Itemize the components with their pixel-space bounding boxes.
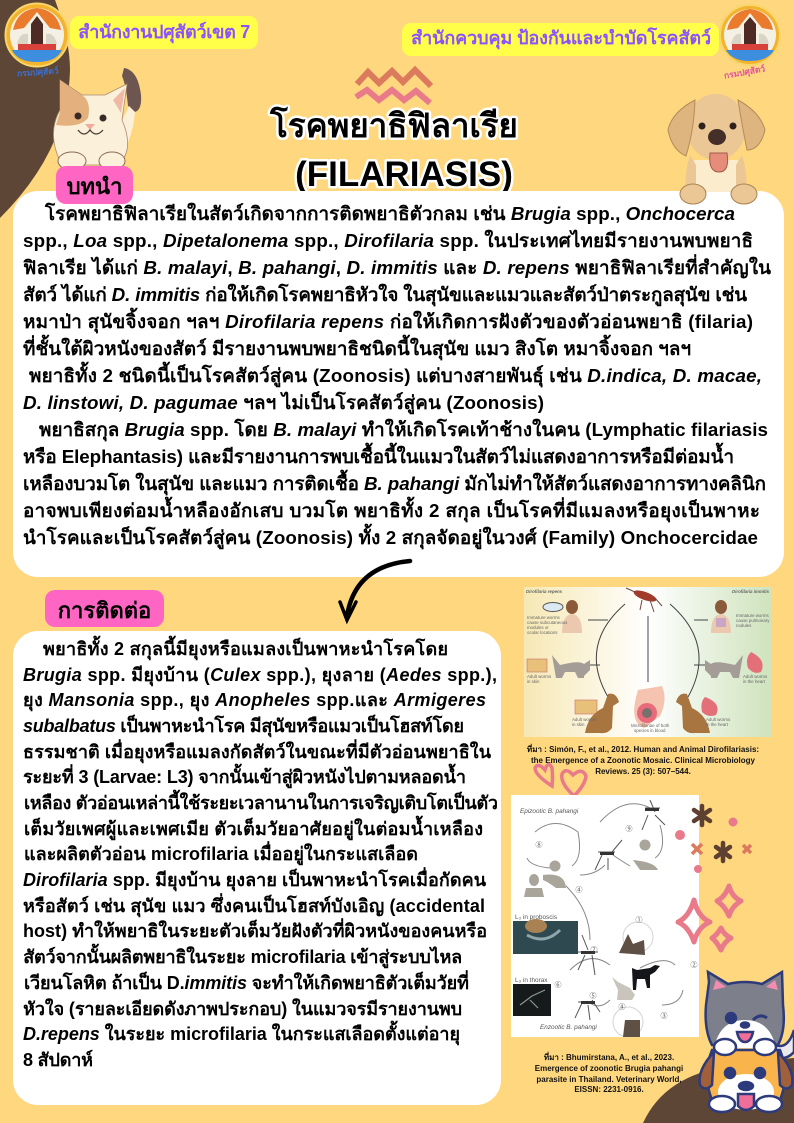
icon: cat (53, 68, 141, 170)
human figures (562, 600, 731, 633)
panel: transmission (13, 631, 501, 1105)
icon: dog (668, 94, 765, 204)
dogs (585, 694, 710, 733)
zigzag decoration (356, 70, 431, 103)
caption: figure 2 source: parasite in Thailand. Veterinary World, (536, 1075, 682, 1084)
stage numbers: ③ (660, 1012, 668, 1020)
text block: transmission: พยาธิทั้ง 2 สกุลนี้มียุงหรือแมลงเป็นพาหะนำโรคโดย (43, 635, 448, 661)
black dog and white cat (612, 965, 660, 1000)
logo left (6, 4, 68, 79)
title: โรคพยาธิฟิลาเรีย (269, 106, 518, 144)
caption: figure 2 source: EISSN: 2231-0916. (574, 1085, 644, 1094)
label: regional office (70, 16, 258, 49)
figure: Dirofilaria life cycle: species in blood (634, 728, 666, 733)
arrow (340, 561, 410, 620)
figure: Dirofilaria life cycle: ocular locations (527, 630, 558, 635)
figure: Dirofilaria life cycle: Adult worms (572, 717, 597, 722)
caption: figure 1 source: Reviews. 25 (3): 507–544. (595, 767, 691, 776)
text block: transmission (23, 635, 498, 1070)
photo: L3 in thorax (513, 984, 551, 1016)
brown mound bottom right (643, 1058, 794, 1123)
text block: transmission: ยุง Mansonia spp., ยุง Anopheles spp.และ Armigeres (23, 690, 486, 712)
figure: Brugia pahangi life cycle: L₃ in proboscis (515, 914, 557, 921)
skin and heart samples (527, 652, 763, 716)
figure: Dirofilaria life cycle: in the heart (743, 679, 766, 684)
text block: introduction: spp., Loa spp., Dipetalonema spp., Dirofilaria spp. ในประเทศไทยมีรายงานพบพยาธิ (23, 229, 753, 251)
stage numbers: ⑧ (536, 841, 542, 849)
caption: figure 2 source: ที่มา : Bhumirstana, A., et al., 2023. (544, 1051, 674, 1062)
stage numbers: ⑥ (554, 981, 562, 989)
text block: introduction: พยาธิทั้ง 2 ชนิดนี้เป็นโรคสัตว์สู่คน (Zoonosis) แต่บางสายพันธุ์ เช่น D.indica, D. macae, (29, 361, 762, 388)
stage numbers: ④ (576, 886, 582, 894)
text block: transmission: หัวใจ (รายละเอียดดังภาพประกอบ) ในแมวจรมีรายงานพบ (23, 998, 462, 1019)
heading: transmission (45, 590, 164, 627)
caption: figure 1 source (527, 743, 759, 776)
heading: introduction: บทนำ (67, 174, 122, 199)
text block: introduction: นำโรคและเป็นโรคสัตว์สู่คน (Zoonosis) ทั้ง 2 สกุลจัดอยู่ในวงศ์ (Family) Onchocercidae (23, 523, 758, 550)
label: disease control bureau: สำนักควบคุม ป้องกันและบำบัดโรคสัตว์ (411, 27, 711, 50)
husky head (706, 972, 784, 1048)
eye (543, 602, 563, 612)
stage numbers: ⑦ (590, 946, 598, 954)
logo right: กรมปศุสัตว์ (723, 63, 766, 82)
stage numbers: ⑤ (590, 992, 596, 1000)
life cycle arrows (527, 804, 683, 1006)
figure: Dirofilaria life cycle: in the heart (706, 722, 729, 727)
mosquito (626, 588, 662, 612)
hearts (535, 764, 586, 796)
brown corner blob top left (0, 0, 70, 218)
grey human silhouettes (524, 840, 658, 897)
text block: transmission: subalbatus เป็นพาหะนำโรค มีสุนัขหรือแมวเป็นโฮสท์โดย (23, 714, 464, 738)
caption: figure 2 source (535, 1051, 683, 1094)
label: regional office: สำนักงานปศุสัตว์เขต 7 (78, 21, 250, 44)
text block: introduction (23, 202, 771, 550)
heading: transmission: การติดต่อ (58, 598, 151, 623)
text block: transmission: เวียนโลหิต ถ้าเป็น D.immitis จะทำให้เกิดพยาธิตัวเต็มวัยที่ (24, 970, 469, 993)
text block: transmission: 8 สัปดาห์ (23, 1049, 93, 1070)
title (269, 106, 518, 194)
text block: introduction: สัตว์ ได้แก่ D. immitis ก่อให้เกิดโรคพยาธิหัวใจ ในสุนัขและแมวและสัตว์ป่าตระกูลสุนัข เช่น (23, 283, 747, 307)
figure: Brugia pahangi life cycle (511, 795, 699, 1037)
figure: Brugia pahangi life cycle: L₃ in thorax (515, 977, 548, 984)
stage numbers: ② (690, 961, 698, 969)
text block: transmission: D.repens ในระยะ microfilaria ในกระแสเลือดตั้งแต่อายุ (23, 1020, 460, 1046)
orange dog head (700, 1050, 792, 1112)
figure: Dirofilaria life cycle: Microfilariae of both (631, 723, 670, 728)
decoration: stars and dots (675, 806, 751, 950)
photo: L3 in proboscis (513, 919, 578, 954)
text block: introduction: ฟิลาเรีย ได้แก่ B. malayi, B. pahangi, D. immitis และ D. repens พยาธิฟิลาเรียที่สำคัญใน (23, 254, 771, 279)
figure: Dirofilaria life cycle: cause subcutaneous (527, 620, 568, 625)
stage numbers: ① (636, 916, 642, 924)
figure: Dirofilaria life cycle: Adult worms (706, 717, 731, 722)
cats (552, 655, 743, 678)
text block: introduction: หมาป่า สุนัขจิ้งจอก ฯลฯ Dirofilaria repens ก่อให้เกิดการฝังตัวของตัวอ่อนพยาธิ (filaria) (23, 307, 753, 334)
figure: Dirofilaria life cycle: in skin (572, 722, 585, 727)
label: disease control bureau (402, 23, 719, 56)
figure: Dirofilaria life cycle: Adult worms (743, 674, 768, 679)
text block: transmission: Dirofilaria spp. มียุงบ้าน ยุงลาย เป็นพาหะนำโรคเมื่อกัดคน (23, 867, 487, 892)
text block: introduction: พยาธิสกุล Brugia spp. โดย B. malayi ทำให้เกิดโรคเท้าช้างในคน (Lymphatic filariasis (39, 418, 768, 442)
figure: Brugia pahangi life cycle: Enzootic B. pahangi (540, 1024, 597, 1031)
caption: figure 2 source: Emergence of zoonotic Brugia pahangi (535, 1064, 683, 1073)
mosquitoes (575, 800, 665, 1020)
heading: introduction (56, 166, 133, 204)
figure: Dirofilaria life cycle: modules or (527, 625, 549, 630)
caption: figure 1 source: ที่มา : Simón, F., et al., 2012. Human and Animal Dirofilariasis: (527, 743, 759, 754)
text block: introduction: D. linstowi, D. pagumae ฯลฯ ไม่เป็นโรคสัตว์สู่คน (Zoonosis) (23, 390, 544, 415)
title: (FILARIASIS) (295, 155, 513, 194)
caption: figure 1 source: the Emergence of a Zoonotic Mosaic. Clinical Microbiology (531, 756, 756, 765)
stage numbers: ⑨ (626, 825, 632, 833)
figure: Dirofilaria life cycle: nodules (736, 623, 752, 628)
text block: transmission: เต็มวัยเพศผู้และเพศเมีย ตัวเต็มวัยอาศัยอยู่ในต่อมน้ำเหลือง (24, 815, 483, 841)
husky paws (714, 1039, 736, 1055)
text block: transmission: เหลือง ตัวอ่อนเหล่านี้ใช้ระยะเวลานานในการเจริญเติบโตเป็นตัว (24, 789, 498, 814)
figure: Brugia pahangi life cycle: Epizootic B. pahangi (520, 808, 579, 815)
figure: Dirofilaria life cycle: Adult worms (527, 674, 552, 679)
text block: transmission: ระยะที่ 3 (Larvae: L3) จากนั้นเข้าสู่ผิวหนังไปตามหลอดน้ำ (23, 763, 466, 789)
stage numbers (536, 825, 698, 1020)
figure: Dirofilaria life cycle: Dirofilaria repens (526, 589, 563, 594)
text block: introduction: เหลืองบวมโต ในสุนัข และแมว การติดเชื้อ B. pahangi มักไม่ทำให้สัตว์แสดงอาการทางคลินิก (23, 469, 766, 496)
figure: Dirofilaria life cycle: in skin (527, 679, 540, 684)
figure: Dirofilaria life cycle (524, 587, 771, 737)
text block: transmission: ธรรมชาติ เมื่อยุงหรือแมลงกัดสัตว์ในขณะที่มีตัวอ่อนพยาธิใน (23, 739, 492, 764)
figure: Dirofilaria life cycle: Dirofilaria immitis (732, 589, 770, 594)
figure: Dirofilaria life cycle: Immature worms (736, 613, 769, 618)
life cycle arrows (585, 604, 708, 697)
figure: Dirofilaria life cycle: Immature worms (527, 615, 560, 620)
husky tail (772, 1030, 794, 1058)
text block: transmission: Brugia spp. มียุงบ้าน (Culex spp.), ยุงลาย (Aedes spp.), (23, 665, 497, 687)
blood vessel (634, 686, 665, 728)
text block: introduction: อาจพบเพียงต่อมน้ำหลืองอักเสบ บวมโต พยาธิทั้ง 2 สกุล เป็นโรคที่มีแมลงหรือยุงเป็นพาหะ (23, 496, 760, 523)
icon: husky puppy on dog (700, 972, 794, 1112)
logo right (720, 5, 780, 82)
inset: cat ears and dog leg (613, 922, 653, 1037)
text block: introduction: ที่ชั้นใต้ผิวหนังของสัตว์ มีรายงานพบพยาธิชนิดนี้ในสุนัข แมว สิงโต หมาจิ้งจอก ฯลฯ (23, 334, 691, 361)
text block: transmission: สัตว์จากนั้นผลิตพยาธิในระยะ microfilaria เข้าสู่ระบบไหล (23, 943, 462, 969)
text block: transmission: หรือสัตว์ เช่น สุนัข แมว ซึ่งคนเป็นโฮสท์บังเอิญ (accidental (23, 893, 485, 918)
text block: transmission: และผลิตตัวอ่อน microfilaria เมื่ออยู่ในกระแสเลือด (24, 841, 418, 866)
text block: introduction: หรือ Elephantasis) และมีรายงานการพบเชื้อนี้ในแมวในสัตว์ไม่แสดงอาการหรือมีต่อมน้ำ (23, 442, 734, 467)
figure: Dirofilaria life cycle: cause pulmonary (736, 618, 770, 623)
logo left: กรมปศุสัตว์ (17, 66, 59, 79)
text block: transmission: host) ทำให้พยาธิในระยะตัวเต็มวัยฝังตัวที่ผิวหนังของคนหรือ (23, 918, 487, 941)
stage numbers: ④ (618, 1003, 626, 1011)
text block: introduction: โรคพยาธิฟิลาเรียในสัตว์เกิดจากการติดพยาธิตัวกลม เช่น Brugia spp., Onchocerca (44, 202, 735, 224)
panel: introduction (13, 191, 784, 577)
